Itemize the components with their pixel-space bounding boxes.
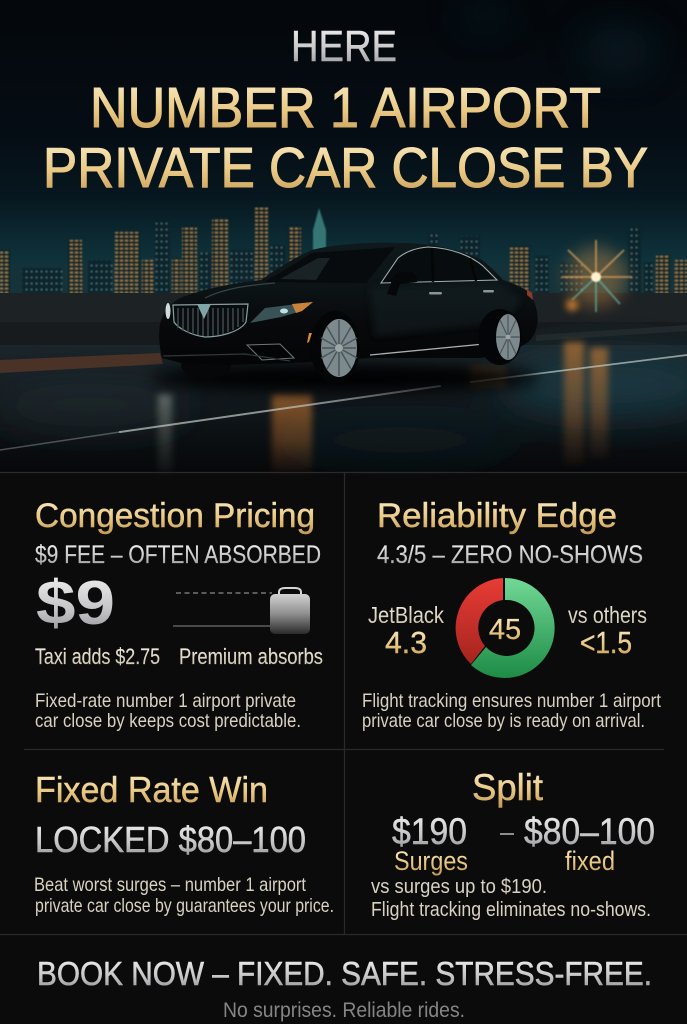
tagline: No surprises. Reliable rides. xyxy=(223,999,465,1022)
hood highlight xyxy=(205,283,275,298)
body text xyxy=(362,690,661,732)
panel: reliability edge xyxy=(362,497,661,732)
heading: Reliability Edge xyxy=(377,497,617,535)
heading: Fixed Rate Win xyxy=(35,769,268,810)
sun-star light flare xyxy=(562,240,632,312)
others score xyxy=(568,602,647,660)
body text xyxy=(35,690,301,732)
car body xyxy=(159,243,538,365)
comparison caption right: Premium absorbs xyxy=(179,644,323,669)
body text: Flight tracking eliminates no-shows. xyxy=(371,899,651,921)
side windows xyxy=(381,247,497,283)
JetBlack score xyxy=(368,602,444,660)
road reflections xyxy=(158,342,608,472)
surge price xyxy=(392,811,468,876)
door handles xyxy=(429,292,442,294)
headlight xyxy=(166,302,313,323)
kerb right xyxy=(536,325,687,341)
price lines xyxy=(173,593,272,626)
black sedan car xyxy=(150,243,540,392)
clouds xyxy=(459,0,654,72)
separator dash xyxy=(500,833,514,835)
panel: congestion pricing xyxy=(35,497,323,732)
heading: Split xyxy=(472,767,544,808)
chrome sill xyxy=(370,344,484,355)
grille xyxy=(173,304,248,337)
car shadow xyxy=(150,364,540,392)
body text xyxy=(371,876,651,921)
road sheen xyxy=(0,353,687,456)
others score: vs others xyxy=(568,602,647,628)
wet road xyxy=(0,345,687,472)
JetBlack score: JetBlack xyxy=(368,602,444,628)
donut chart: 45 xyxy=(489,614,521,646)
title block xyxy=(43,22,648,200)
rear wheel xyxy=(478,309,522,365)
eyebrow: HERE: HERE xyxy=(291,22,397,71)
body text xyxy=(34,874,334,917)
locked price: LOCKED $80–100 xyxy=(35,819,306,860)
donut chart xyxy=(456,578,555,678)
fixed price: fixed xyxy=(565,846,615,876)
lane marking xyxy=(0,355,687,450)
subheading: 4.3/5 – ZERO NO-SHOWS xyxy=(377,541,643,569)
tail light xyxy=(527,289,533,300)
body text: private car close by guarantees your price. xyxy=(35,895,334,917)
panel grid dividers xyxy=(0,472,687,934)
windscreen xyxy=(265,247,395,283)
others score: <1.5 xyxy=(580,625,632,660)
night sky xyxy=(0,0,687,300)
title line 1: NUMBER 1 AIRPORT xyxy=(90,76,601,140)
body text: Fixed-rate number 1 airport private xyxy=(35,690,296,712)
side marker xyxy=(307,333,312,343)
subheading: $9 FEE – OFTEN ABSORBED xyxy=(35,541,321,569)
JetBlack score: 4.3 xyxy=(385,625,427,660)
door sheen xyxy=(370,284,522,336)
body text: car close by keeps cost predictable. xyxy=(35,710,301,732)
panel: split xyxy=(371,767,655,921)
concrete barrier wall xyxy=(0,293,687,323)
hero photo: night city and car xyxy=(0,0,687,472)
city skyline xyxy=(0,207,687,295)
icon: suitcase xyxy=(270,588,310,634)
fixed price: $80–100 xyxy=(524,811,655,852)
big number: $9 xyxy=(36,569,115,638)
heading: Congestion Pricing xyxy=(35,497,315,535)
comparison caption left: Taxi adds $2.75 xyxy=(35,644,160,669)
surge price: $190 xyxy=(392,811,467,852)
panel: fixed rate win xyxy=(34,769,334,917)
surge price: Surges xyxy=(394,846,468,876)
fixed price xyxy=(524,811,655,876)
body text: Beat worst surges – number 1 airport xyxy=(34,874,306,896)
far front wheel xyxy=(181,352,231,378)
kerb left xyxy=(0,353,163,373)
front wheel xyxy=(310,311,360,383)
body text: vs surges up to $190. xyxy=(371,876,547,898)
footer call to action xyxy=(37,955,652,1022)
mirror xyxy=(387,272,417,296)
lower bumper vents xyxy=(247,344,294,360)
body text: private car close by is ready on arrival. xyxy=(362,710,645,732)
